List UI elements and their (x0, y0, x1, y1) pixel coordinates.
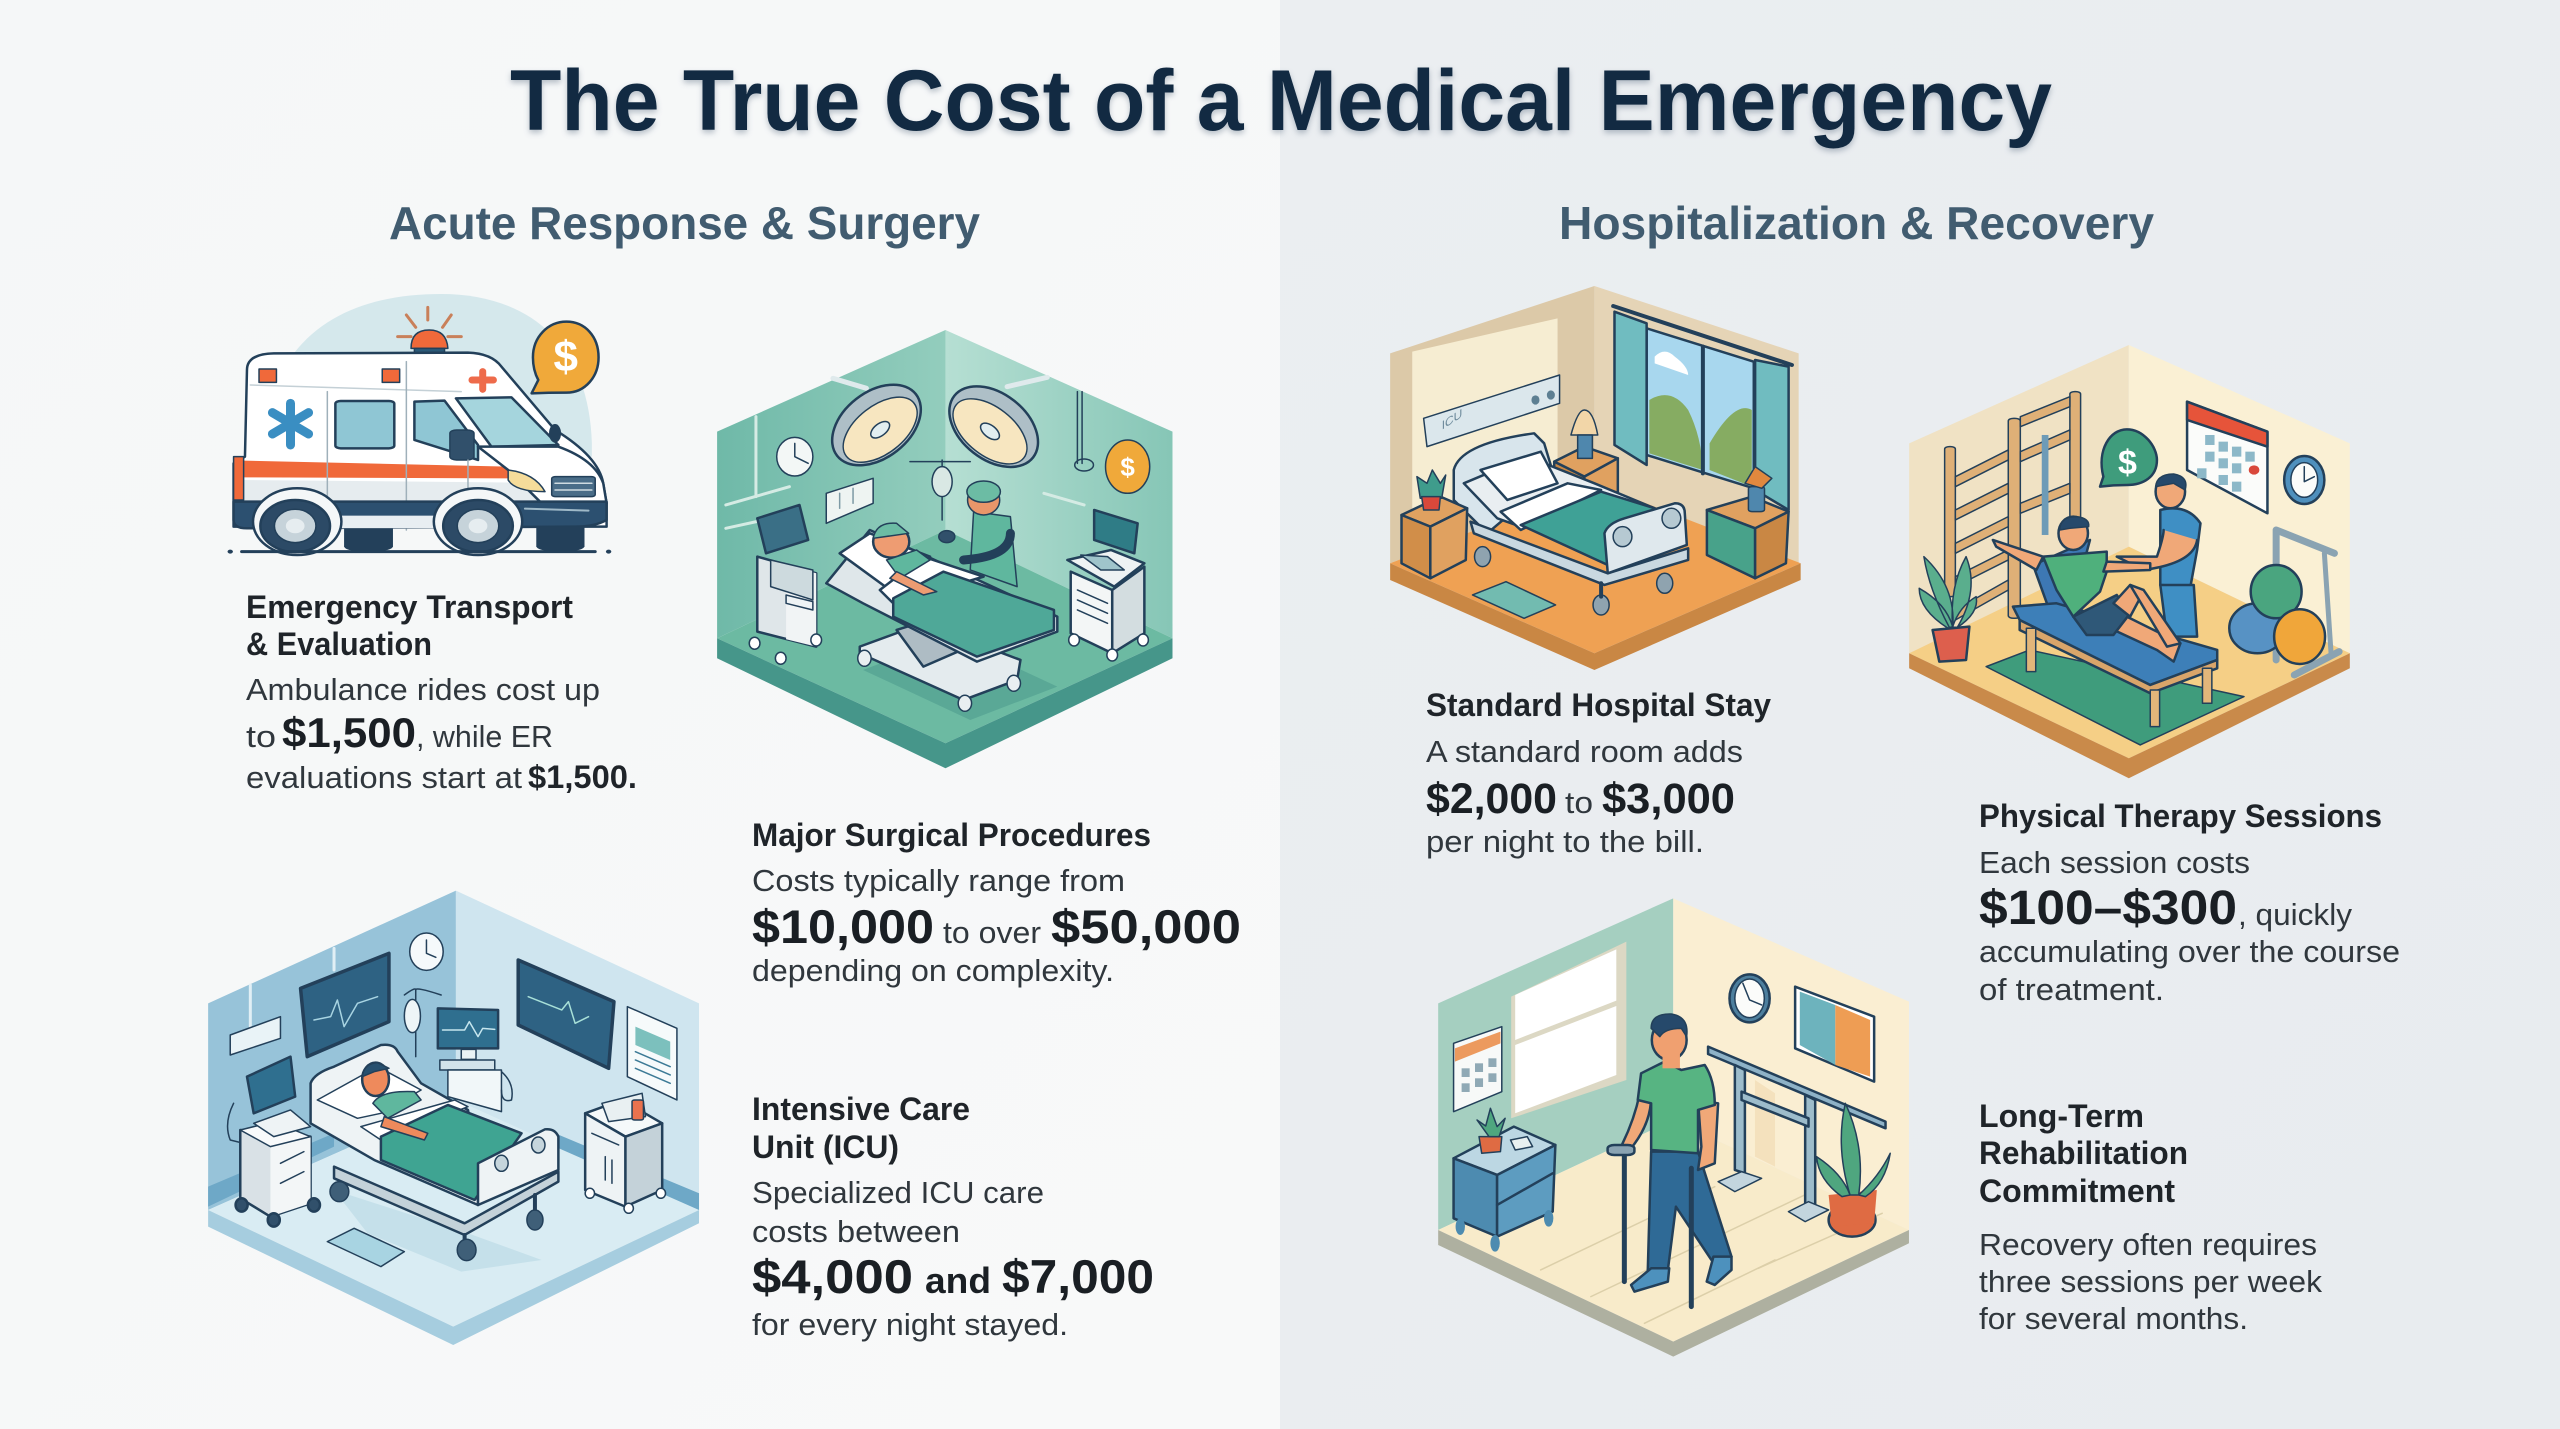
text block: Intensive Care Unit: and (925, 1260, 991, 1301)
illustration: walking rehabilitation room (1438, 898, 1909, 1357)
illustration: physical therapy room (1909, 345, 2350, 778)
text block: Emergency Transport & Evaluation: $1,500. (528, 759, 637, 795)
text block: Emergency Transport & Evaluation (246, 589, 637, 795)
text block: Intensive Care Unit (752, 1091, 1154, 1342)
text block: Long-Term Rehabilitation Commitment: for several months. (1979, 1301, 2248, 1336)
text block: Emergency Transport & Evaluation: & Evaluation (246, 626, 432, 662)
text block: Physical Therapy Sessions: , quickly (2238, 897, 2353, 932)
text block: Long-Term Rehabilitation Commitment: Recovery often requires (1979, 1227, 2317, 1262)
text block: Long-Term Rehabilitation Commitment: Commitment (1979, 1173, 2175, 1209)
text block: Emergency Transport & Evaluation: Ambulance rides cost up (246, 672, 600, 707)
illustration: ambulance (228, 294, 611, 555)
illustration: ICU room (208, 891, 699, 1345)
text block: Major Surgical Procedures: $50,000 (1051, 900, 1241, 953)
text block: Long-Term Rehabilitation Commitment (1979, 1098, 2323, 1336)
text block: Emergency Transport & Evaluation: evaluations start at (246, 760, 522, 795)
text block: Major Surgical Procedures: depending on complexity. (752, 953, 1114, 988)
text block: Physical Therapy Sessions: Physical Therapy Sessions (1979, 798, 2382, 834)
text block: Major Surgical Procedures: Major Surgical Procedures (752, 817, 1151, 853)
text block: Intensive Care Unit: costs between (752, 1214, 960, 1249)
text block: Physical Therapy Sessions (1979, 798, 2400, 1007)
title: The True Cost of a Medical Emergency (510, 53, 2052, 149)
text block: Physical Therapy Sessions: accumulating over the course (1979, 934, 2400, 969)
text block: Emergency Transport & Evaluation: $1,500 (282, 709, 416, 756)
text block: Standard Hospital Stay: $2,000 (1426, 775, 1557, 823)
text block: Emergency Transport & Evaluation: , while ER (416, 719, 553, 754)
illustration: hospital room: ICU (1442, 406, 1462, 433)
text block: Standard Hospital Stay: Standard Hospital Stay (1426, 687, 1771, 723)
illustration: ambulance: $ (554, 332, 578, 381)
illustration: operating room (717, 330, 1172, 768)
text block: Major Surgical Procedures: to over (943, 915, 1041, 950)
text block: Physical Therapy Sessions: $100–$300 (1979, 882, 2237, 935)
text block: Major Surgical Procedures: $10,000 (752, 900, 934, 953)
text block: Intensive Care Unit: Specialized ICU care (752, 1175, 1044, 1210)
text block: Physical Therapy Sessions: Each session costs (1979, 845, 2250, 880)
text block: Standard Hospital Stay (1426, 687, 1771, 859)
text block: Standard Hospital Stay: to (1565, 785, 1593, 820)
text block: Intensive Care Unit: Intensive Care (752, 1091, 970, 1127)
text block: Standard Hospital Stay: per night to the bill. (1426, 824, 1704, 859)
illustration: operating room: $ (1120, 452, 1135, 482)
text block: Intensive Care Unit: $4,000 (752, 1250, 913, 1303)
text block: Major Surgical Procedures: Costs typically range from (752, 863, 1125, 898)
text block: Long-Term Rehabilitation Commitment: Long-Term (1979, 1098, 2144, 1134)
text block: Long-Term Rehabilitation Commitment: Rehabilitation (1979, 1135, 2188, 1171)
heading: Acute Response & Surgery: Acute Response & Surgery (389, 197, 980, 249)
text block: Major Surgical Procedures (752, 817, 1241, 988)
illustration: physical therapy room: $ (2118, 444, 2137, 482)
text block: Emergency Transport & Evaluation: Emergency Transport (246, 589, 573, 625)
text block: Physical Therapy Sessions: of treatment. (1979, 972, 2164, 1007)
text block: Intensive Care Unit: Unit (ICU) (752, 1129, 899, 1165)
text block: Intensive Care Unit: $7,000 (1002, 1250, 1154, 1303)
text block: Long-Term Rehabilitation Commitment: three sessions per week (1979, 1264, 2323, 1299)
text block: Emergency Transport & Evaluation: to (246, 719, 276, 754)
illustration: hospital room (1390, 286, 1801, 670)
text block: Standard Hospital Stay: A standard room adds (1426, 734, 1743, 769)
text block: Standard Hospital Stay: $3,000 (1602, 775, 1735, 823)
heading: Hospitalization & Recovery: Hospitalization & Recovery (1559, 197, 2154, 249)
text block: Intensive Care Unit: for every night stayed. (752, 1307, 1068, 1342)
